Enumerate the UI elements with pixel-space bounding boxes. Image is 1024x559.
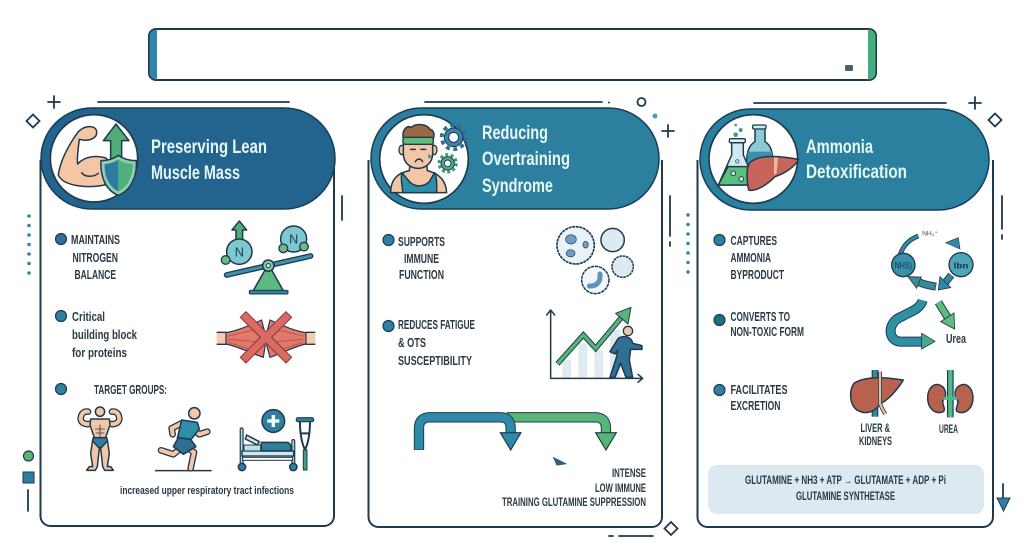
bullet: maintains nitrogen balance: NITROGEN — [72, 251, 118, 265]
icon: nitrogen balance scale — [221, 221, 311, 294]
panel: reducing overtraining syndrome — [368, 108, 662, 527]
heading 2 — [482, 123, 570, 197]
heading 1: Muscle Mass — [151, 163, 240, 184]
arrows: two elbow flow arrows — [419, 417, 616, 466]
heading 1: Preserving Lean — [151, 137, 267, 158]
heading 3: Ammonia — [806, 137, 873, 158]
icon: flasks and liver — [709, 115, 799, 203]
callout: glutamine synthetase reaction — [708, 465, 984, 514]
icon: liver with vessels — [851, 370, 903, 417]
heading 2: Overtraining — [482, 149, 570, 170]
heading 1 — [151, 137, 267, 184]
heading 3 — [806, 137, 907, 183]
header pill 2 — [371, 108, 659, 209]
callout: glutamine synthetase reaction: GLUTAMINE SYNTHETASE — [796, 491, 895, 503]
labels: liver and kidneys, urea: UREA — [939, 424, 958, 436]
icon: bodybuilder — [81, 407, 119, 470]
heading 2: Syndrome — [482, 176, 553, 197]
labels: liver and kidneys, urea: KIDNEYS — [859, 436, 892, 448]
callout: glutamine synthetase reaction: GLUTAMINE + NH3 + ATP → GLUTAMATE + ADP + Pi — [745, 475, 946, 487]
bullet: captures ammonia byproduct: AMMONIA — [730, 251, 771, 265]
bullet: reduces fatigue: REDUCES FATIGUE — [398, 318, 475, 332]
bullet: converts to non-toxic form: CONVERTS TO — [730, 310, 790, 324]
labels: liver and kidneys, urea: LIVER & — [860, 423, 890, 435]
icon: immune cells — [557, 227, 633, 294]
bullet: supports immune function — [383, 234, 445, 282]
title banner (empty) — [149, 29, 876, 80]
labels: suppression cascade — [502, 468, 646, 509]
bullet: captures ammonia byproduct: CAPTURES — [730, 234, 777, 248]
bullet: critical building block — [56, 310, 137, 360]
bullet: critical building block: building block — [72, 328, 137, 342]
diagram: ammonia cycle to urea: lbn — [954, 260, 968, 270]
bullet: facilitates excretion — [714, 383, 788, 413]
panel: preserving lean muscle mass — [40, 108, 335, 526]
diagram: ammonia cycle to urea — [891, 231, 973, 349]
icon: runner — [155, 408, 212, 471]
labels: suppression cascade: TRAINING GLUTAMINE SUPPRESSION — [502, 497, 646, 509]
bullet: facilitates excretion: FACILITATES — [730, 383, 788, 397]
bullet: critical building block: Critical — [72, 310, 105, 324]
icon: kidneys — [928, 370, 973, 417]
card outline 1 — [40, 160, 334, 526]
bullet: target groups — [56, 383, 167, 397]
icon: damaged muscle crossed out — [217, 317, 315, 357]
bullet: target groups: TARGET GROUPS: — [94, 383, 167, 397]
bullet: converts to non-toxic form: NON-TOXIC FORM — [730, 325, 804, 339]
bullet: supports immune function: IMMUNE — [404, 252, 439, 266]
bullet: maintains nitrogen balance: MAINTAINS — [71, 233, 120, 247]
diagram: ammonia cycle to urea: NH₄⁺ — [922, 231, 938, 238]
bullet: maintains nitrogen balance — [56, 233, 120, 282]
card outline 3 — [698, 160, 993, 527]
labels: liver and kidneys, urea — [859, 423, 958, 448]
bullet: captures ammonia byproduct: BYPRODUCT — [730, 268, 784, 282]
icon: hospital bed and crutch — [238, 410, 314, 471]
card outline 2 — [368, 160, 662, 527]
bullet: maintains nitrogen balance: BALANCE — [74, 268, 116, 282]
header pill 3 — [700, 109, 989, 210]
icon: flexed arm with shield — [50, 115, 138, 202]
icon: nitrogen balance scale: N — [289, 233, 298, 247]
bullet: critical building block: for proteins — [72, 346, 127, 360]
decorative accents — [23, 96, 1010, 536]
icon: fatigued athlete with gears — [380, 115, 468, 203]
diagram: ammonia cycle to urea: NHS) — [895, 261, 912, 271]
bullet: converts to non-toxic form — [714, 310, 804, 339]
bullet: captures ammonia byproduct — [714, 234, 784, 282]
icon: nitrogen balance scale: N — [235, 245, 244, 259]
bullet: facilitates excretion: EXCRETION — [730, 399, 780, 413]
diagram: ammonia cycle to urea: Urea — [946, 332, 967, 346]
bullet: reduces fatigue — [383, 318, 475, 368]
bullet: reduces fatigue: SUSCEPTIBILITY — [398, 354, 472, 368]
heading 2: Reducing — [482, 123, 548, 144]
heading 3: Detoxification — [806, 162, 907, 183]
bullet: supports immune function: SUPPORTS — [398, 235, 445, 249]
caption: respiratory infections: increased upper respiratory tract infections — [120, 485, 294, 497]
bullet: supports immune function: FUNCTION — [399, 268, 444, 282]
header pill 1 — [41, 108, 335, 209]
bullet: reduces fatigue: & OTS — [398, 336, 426, 350]
labels: suppression cascade: INTENSE — [612, 468, 646, 480]
panel: ammonia detoxification — [698, 109, 993, 527]
chart: rising trend with walking figure — [547, 307, 643, 382]
labels: suppression cascade: LOW IMMUNE — [595, 483, 646, 495]
